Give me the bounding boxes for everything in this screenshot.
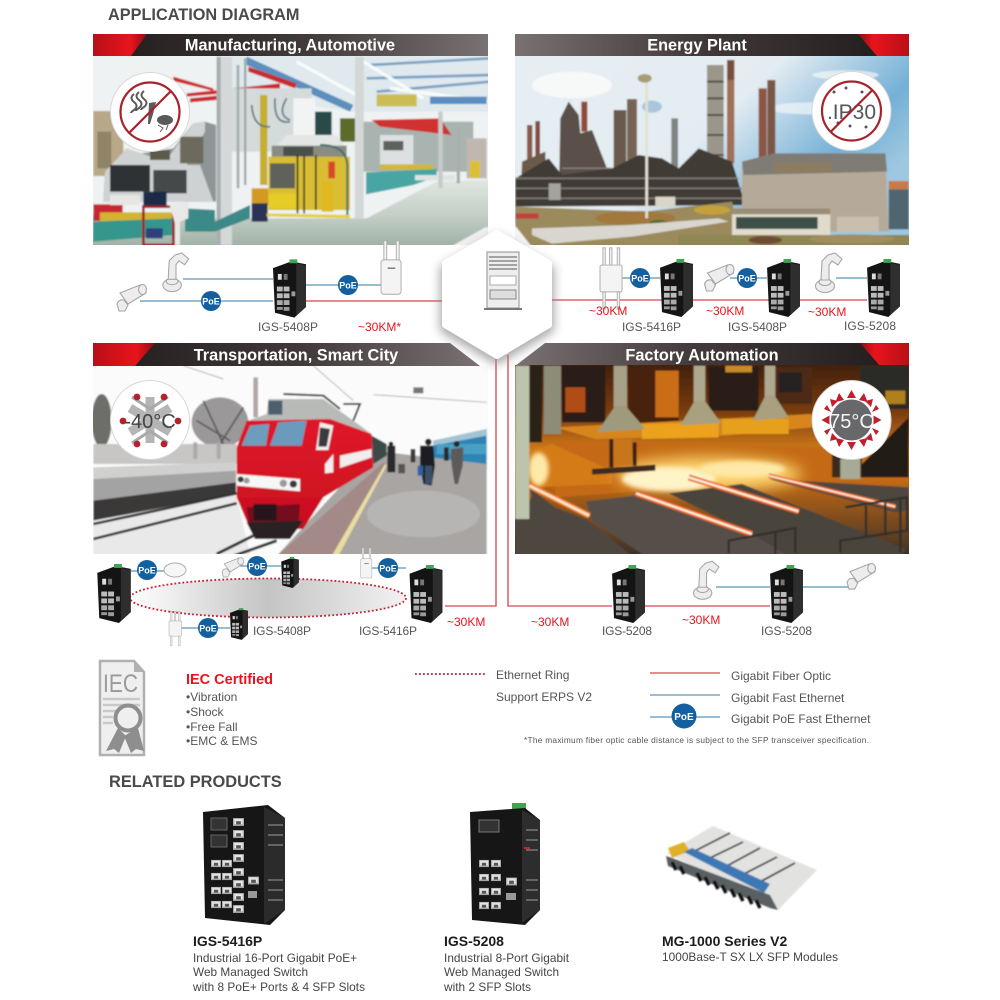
panel: energy plant	[512, 34, 912, 247]
product: IGS-5208	[443, 803, 570, 994]
switch IGS-5416P	[660, 259, 693, 317]
icon: no EMI / surge	[110, 72, 190, 152]
PoE badge	[737, 268, 757, 288]
product text: Web Managed Switch	[444, 965, 559, 979]
PoE badge: PoE	[138, 566, 156, 576]
panel: factory automation	[512, 343, 912, 556]
labels: IGS-5208	[602, 624, 652, 638]
switch IGS-5208	[612, 565, 645, 623]
heading bar: energy plant: Energy Plant	[647, 36, 747, 54]
switch IGS-5416P	[410, 565, 442, 623]
PoE badge: PoE	[202, 296, 220, 306]
icon: -40 degrees C	[110, 380, 190, 460]
PoE badge: PoE	[738, 274, 756, 284]
heading bar: factory automation: Factory Automation	[625, 346, 779, 364]
PoE badge: PoE	[248, 562, 266, 572]
panel: manufacturing, automotive	[90, 34, 490, 247]
icon: no IP30	[812, 72, 891, 150]
icon: server	[484, 252, 522, 310]
labels	[531, 613, 812, 638]
labels: IGS-5408P	[253, 624, 311, 638]
product image	[203, 805, 285, 925]
text block: IEC certified: •EMC & EMS	[186, 734, 258, 748]
icon: outdoor access point	[600, 248, 622, 309]
text block: IEC certified: IEC Certified	[186, 672, 273, 688]
icon: access point	[381, 241, 401, 294]
heading bar: transportation	[93, 343, 480, 366]
labels: ~30KM	[531, 615, 569, 629]
icon: 75 degrees C: 75°C	[829, 411, 874, 433]
fiber lines	[306, 300, 867, 606]
distance: ~30KM*	[358, 320, 401, 334]
PoE badge	[137, 560, 157, 580]
legend: Gigabit PoE Fast Ethernet	[731, 712, 871, 726]
product text	[662, 933, 838, 964]
network: energy plant devices	[589, 248, 900, 334]
server hexagon	[440, 233, 554, 365]
switch bottom	[230, 608, 248, 640]
heading bar: factory automation	[515, 343, 909, 366]
product text: Industrial 16-Port Gigabit PoE+	[193, 951, 357, 965]
text block: IEC certified: •Shock	[186, 705, 225, 719]
icon: dome camera	[693, 561, 719, 599]
product text	[443, 933, 570, 994]
PoE badge	[338, 275, 358, 295]
product text: with 2 SFP Slots	[443, 980, 531, 994]
photo: red train in snow	[90, 364, 490, 556]
icon: dome camera	[163, 253, 189, 292]
switch IGS-5408P	[767, 259, 800, 317]
ethernet lines	[131, 278, 867, 628]
footnote: *The maximum fiber optic cable distance is subject to the SFP transceiver specification.	[524, 735, 869, 745]
icon: IEC certificate	[100, 661, 144, 755]
panel: transportation, smart city	[90, 343, 490, 556]
photo: steel furnace	[512, 364, 912, 556]
labels: ~30KM	[589, 304, 627, 318]
legend: Gigabit Fiber Optic	[731, 669, 831, 683]
product text: Industrial 8-Port Gigabit	[444, 951, 570, 965]
labels: ~30KM	[447, 615, 485, 629]
heading bar: transportation: Transportation, Smart City	[194, 346, 398, 364]
product text	[192, 933, 365, 994]
labels: ~30KM	[682, 613, 720, 627]
heading: related products: RELATED PRODUCTS	[109, 773, 282, 791]
legend	[415, 668, 871, 728]
network: factory devices	[531, 561, 875, 638]
PoE badge	[247, 556, 267, 576]
icon: no IP30: .IP30	[827, 101, 876, 124]
icon: camera	[847, 563, 875, 589]
labels: ~30KM	[808, 305, 846, 319]
PoE badge	[201, 291, 221, 311]
PoE badge: PoE	[379, 564, 397, 574]
PoE badge	[630, 268, 650, 288]
switch top	[281, 557, 299, 588]
labels: IGS-5416P	[622, 320, 681, 334]
text block: IEC certified: •Free Fall	[186, 720, 238, 734]
text block: IEC certified	[186, 672, 273, 748]
icon: ceiling access point	[164, 563, 186, 577]
icon: dome camera	[816, 253, 842, 292]
PoE badge: PoE	[199, 624, 217, 634]
labels: IGS-5408P	[728, 320, 787, 334]
product text: MG-1000 Series V2	[662, 933, 788, 949]
legend: PoE	[674, 712, 694, 723]
icon: outdoor access point	[169, 611, 181, 646]
labels	[589, 304, 896, 334]
icon: camera	[222, 558, 244, 577]
product: MG-1000 Series V2	[662, 826, 838, 964]
legend: Support ERPS V2	[496, 690, 592, 704]
labels: ~30KM	[706, 304, 744, 318]
labels: IGS-5208	[844, 319, 896, 333]
legend: Gigabit Fast Ethernet	[731, 691, 845, 705]
product text: Web Managed Switch	[193, 965, 308, 979]
text block: IEC certified: •Vibration	[186, 690, 237, 704]
network: ethernet ring	[97, 548, 485, 646]
PoE badge	[198, 618, 218, 638]
icon: IEC certificate: IEC	[103, 670, 138, 698]
labels	[253, 615, 485, 638]
icon: camera	[117, 284, 146, 311]
product text: IGS-5416P	[193, 933, 262, 949]
PoE badge: PoE	[339, 280, 357, 290]
legend: Ethernet Ring	[496, 668, 569, 682]
product text: IGS-5208	[444, 933, 504, 949]
product image	[470, 803, 540, 925]
icon: camera	[704, 264, 734, 291]
heading bar: energy plant	[515, 34, 909, 56]
ring	[130, 578, 406, 618]
icon: -40 degrees C: -40°C	[124, 411, 176, 433]
product: IGS-5416P	[192, 805, 365, 994]
icon: 75 degrees C	[812, 380, 891, 460]
heading bar: manufacturing: Manufacturing, Automotive	[185, 36, 395, 54]
switch IGS-5408P	[273, 259, 306, 318]
switch IGS-5208	[867, 259, 900, 317]
product text: 1000Base-T SX LX SFP Modules	[662, 950, 838, 964]
product text: with 8 PoE+ Ports & 4 SFP Slots	[192, 980, 365, 994]
switch IGS-5208	[770, 565, 803, 623]
heading bar: manufacturing	[93, 34, 488, 56]
label: IGS-5408P	[258, 320, 318, 334]
product image	[666, 826, 817, 910]
PoE badge	[378, 558, 398, 578]
switch left	[97, 564, 131, 623]
title: application diagram: APPLICATION DIAGRAM	[108, 6, 299, 24]
photo: refinery	[512, 55, 912, 247]
photo: car assembly line	[90, 55, 490, 247]
labels: IGS-5416P	[359, 624, 417, 638]
network: manufacturing devices	[117, 241, 401, 334]
icon: access point	[361, 548, 372, 578]
PoE badge: PoE	[631, 274, 649, 284]
labels: IGS-5208	[761, 624, 812, 638]
